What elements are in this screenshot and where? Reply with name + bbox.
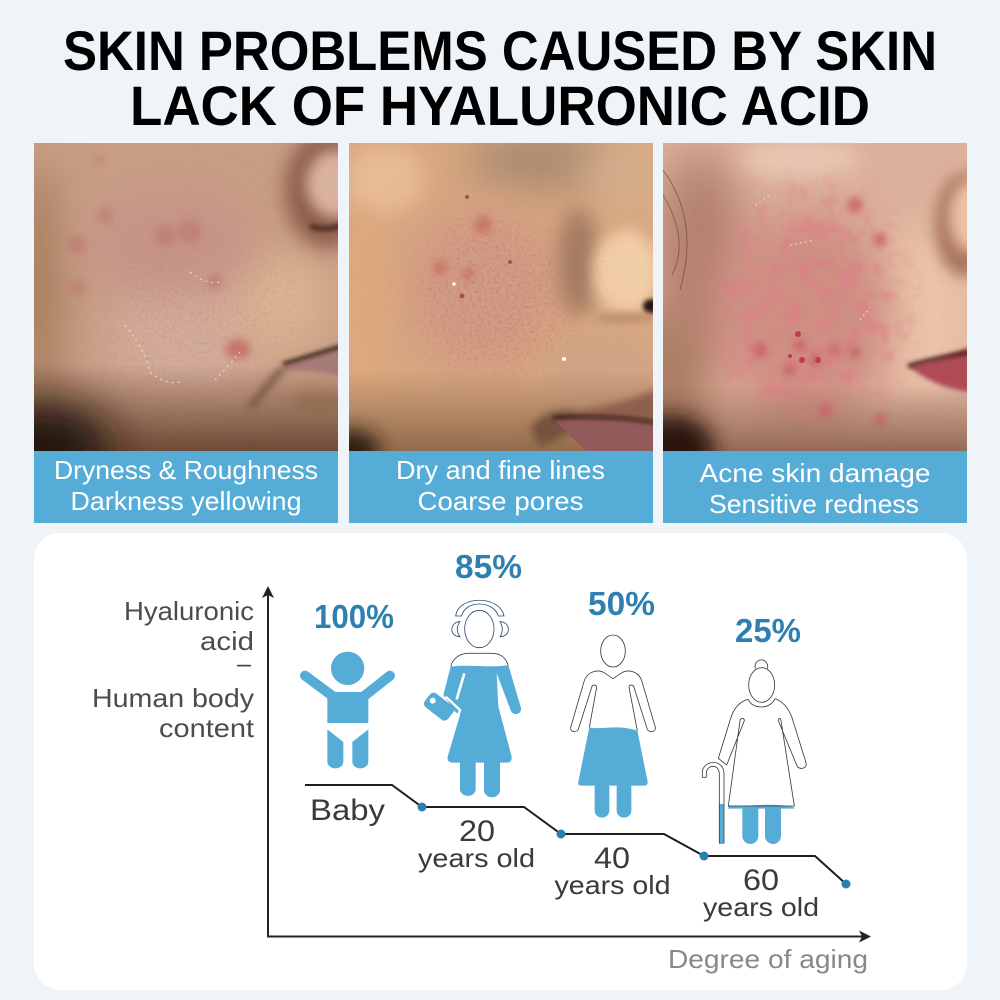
age label: 60 years old: years old — [703, 892, 819, 922]
age label: 20 years old — [418, 815, 535, 873]
age label: 20 years old: years old — [418, 843, 535, 873]
age label: 40 years old: 40 — [594, 842, 630, 875]
y axis label: content — [159, 713, 255, 743]
panel: dryness and roughness — [34, 143, 338, 523]
age label: 20 years old: 20 — [459, 815, 495, 848]
panel: acne skin damage — [663, 143, 967, 523]
age label: 40 years old: years old — [554, 870, 670, 900]
caption bar: Sensitive redness — [709, 489, 919, 519]
percentage: 50%: 50% — [588, 585, 655, 622]
age label: 60 years old — [703, 864, 819, 922]
percentage: 100%: 100% — [314, 598, 394, 635]
panel: dry and fine lines — [349, 143, 653, 523]
chart axes — [262, 586, 871, 942]
panel: hyaluronic acid by age — [34, 533, 967, 990]
x axis label: Degree of aging — [668, 944, 868, 974]
percentage: 25%: 25% — [735, 612, 801, 649]
icon: baby — [305, 652, 390, 768]
caption bar: Dryness & Roughness — [54, 455, 318, 485]
step line — [305, 785, 850, 888]
photo: dry rough cheek — [34, 143, 338, 451]
icon: woman aged 40 — [571, 635, 655, 818]
caption bar — [663, 451, 967, 523]
age label: 60 years old: 60 — [743, 864, 779, 897]
photo: fine lines and pores — [349, 143, 653, 451]
title: SKIN PROBLEMS CAUSED BY SKIN — [63, 19, 937, 82]
caption bar: Acne skin damage — [700, 458, 930, 488]
photo: acne redness — [663, 143, 967, 451]
y axis label — [92, 596, 255, 743]
title — [63, 19, 937, 137]
caption bar: Darkness yellowing — [70, 486, 302, 516]
caption bar — [34, 451, 338, 523]
icon: woman aged 20 — [422, 600, 521, 797]
y axis label: – — [237, 648, 252, 678]
y axis label: Hyaluronic — [124, 596, 254, 626]
y axis label: acid — [200, 626, 254, 656]
caption bar — [349, 451, 653, 523]
caption bar: Dry and fine lines — [396, 455, 605, 485]
caption bar: Coarse pores — [418, 486, 584, 516]
icon: woman aged 60 with cane — [702, 660, 806, 844]
age label: 40 years old — [554, 842, 670, 900]
percentage: 85%: 85% — [455, 548, 522, 585]
title: LACK OF HYALURONIC ACID — [130, 74, 870, 137]
y axis label: Human body — [92, 683, 254, 713]
age label: baby: Baby — [310, 794, 385, 827]
